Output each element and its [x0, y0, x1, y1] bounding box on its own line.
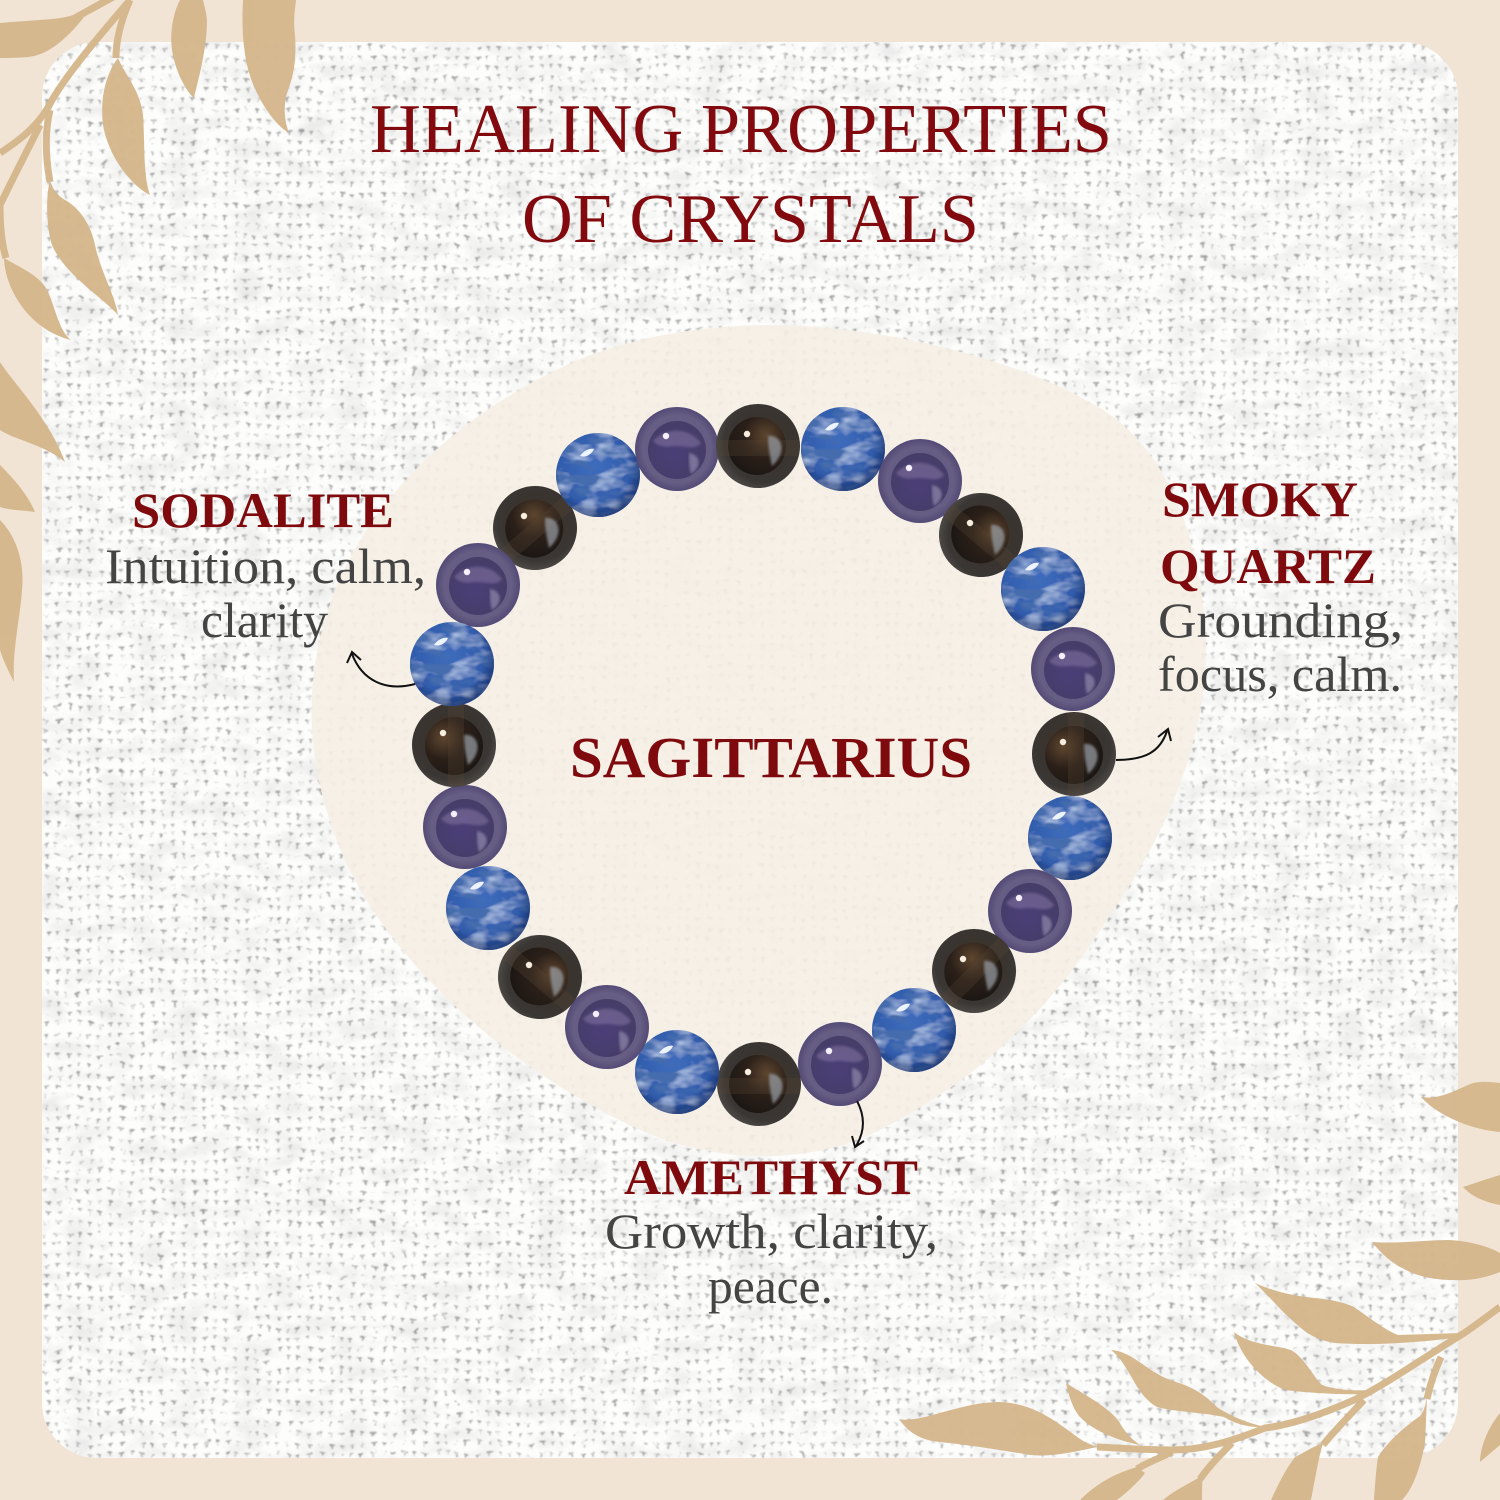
beige blob behind bracelet	[312, 325, 1206, 1156]
leaves: bottom-right branch	[899, 1082, 1500, 1500]
callout: smoky quartz: Grounding,	[1158, 592, 1403, 648]
callout: sodalite: SODALITE	[132, 482, 394, 538]
bead: smoky quartz	[716, 404, 800, 488]
bead: amethyst	[436, 543, 520, 627]
bead: amethyst	[423, 785, 507, 869]
arrow: sodalite	[347, 652, 415, 686]
title: HEALING PROPERTIES	[370, 91, 1112, 168]
bead: amethyst	[878, 439, 962, 523]
bead: sodalite	[1001, 547, 1085, 631]
arrow: amethyst	[852, 1101, 864, 1147]
bead: amethyst	[798, 1022, 882, 1106]
callout: amethyst: AMETHYST	[624, 1149, 918, 1205]
callout: sodalite: clarity	[201, 592, 328, 648]
callout: smoky quartz: focus, calm.	[1158, 646, 1402, 702]
bead: sodalite	[446, 866, 530, 950]
bead: sodalite	[872, 988, 956, 1072]
bead: smoky quartz	[1032, 712, 1116, 796]
bead: smoky quartz	[717, 1042, 801, 1126]
bead: sodalite	[410, 622, 494, 706]
bead: smoky quartz	[915, 912, 1033, 1030]
callout: smoky quartz	[1158, 471, 1403, 702]
bead: smoky quartz	[922, 476, 1040, 594]
bead: amethyst	[1031, 627, 1115, 711]
bead: amethyst	[988, 869, 1072, 953]
bead: amethyst	[565, 985, 649, 1069]
callout: sodalite: Intuition, calm,	[105, 538, 426, 594]
bead: smoky quartz	[476, 469, 594, 587]
leaves: top-left branch	[0, 0, 296, 682]
bead: smoky quartz	[481, 918, 599, 1036]
bead: smoky quartz	[412, 703, 496, 787]
callout: smoky quartz: SMOKY	[1162, 471, 1358, 527]
callout: amethyst	[605, 1149, 938, 1314]
callout: amethyst: peace.	[708, 1258, 833, 1314]
arrow: smoky quartz	[1116, 729, 1171, 760]
bead: sodalite	[556, 433, 640, 517]
bead: sodalite	[1028, 796, 1112, 880]
bead: sodalite	[635, 1030, 719, 1114]
callout: sodalite	[105, 482, 426, 648]
center label: SAGITTARIUS	[570, 725, 972, 790]
bead: amethyst	[635, 407, 719, 491]
title: OF CRYSTALS	[522, 181, 979, 258]
bracelet	[410, 404, 1116, 1126]
callout: amethyst: Growth, clarity,	[605, 1203, 938, 1259]
bead: sodalite	[801, 407, 885, 491]
title	[370, 91, 1112, 258]
callout: smoky quartz: QUARTZ	[1160, 538, 1376, 594]
